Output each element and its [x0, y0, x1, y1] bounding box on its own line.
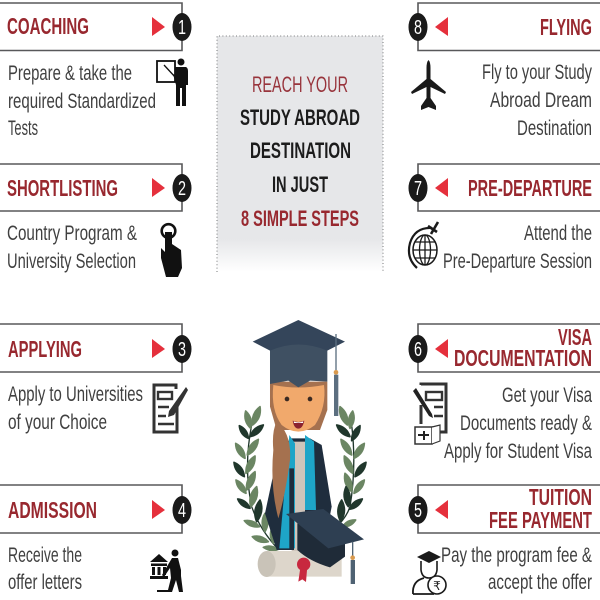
text: shortlisting description: University Selection — [7, 250, 136, 273]
title: coaching: COACHING — [7, 13, 89, 39]
heading: study abroad: STUDY ABROAD — [240, 105, 360, 130]
title: shortlisting: SHORTLISTING — [7, 175, 118, 201]
number badge 4: 4 — [178, 500, 186, 522]
icon: student with rupee coin — [413, 551, 446, 594]
heading: reach your: REACH YOUR — [252, 72, 348, 97]
panel: step 3 applying — [0, 324, 192, 434]
icon: visa documents — [413, 384, 446, 444]
text: admission description — [8, 544, 82, 594]
text: coaching description — [8, 62, 156, 140]
icon: globe and plane — [409, 222, 438, 268]
number badge 5 — [408, 496, 428, 524]
text: coaching description: Tests — [8, 117, 38, 140]
panel: step 8 flying — [408, 3, 600, 140]
text: shortlisting description: Country Program & — [7, 222, 137, 245]
laurel: left — [234, 407, 283, 551]
heading: 8 simple steps: 8 SIMPLE STEPS — [241, 206, 359, 231]
number badge 6: 6 — [414, 339, 422, 361]
number badge 7: 7 — [414, 178, 422, 200]
panel: step 4 admission — [0, 485, 192, 594]
number badge 2: 2 — [178, 178, 186, 200]
illustration: graduate with laurels — [234, 320, 366, 584]
text: visa description — [444, 384, 592, 463]
icon: pointing hand — [161, 224, 182, 277]
arrow — [152, 178, 165, 197]
title: tuition fee payment — [489, 484, 592, 533]
text: payment description — [441, 544, 592, 594]
panel: central headline — [217, 36, 383, 272]
text: applying description — [8, 383, 143, 434]
number badge 4 — [172, 496, 192, 524]
text: admission description: Receive the — [8, 544, 82, 567]
text: coaching description: required Standardized — [8, 90, 156, 113]
text: admission description: offer letters — [8, 571, 82, 594]
arrow — [152, 17, 165, 36]
panel: step 6 visa documentation — [408, 324, 600, 463]
number badge 8 — [408, 13, 428, 41]
icon: university and student — [150, 550, 183, 592]
text: coaching description: Prepare & take the — [8, 62, 132, 85]
number badge 7 — [408, 174, 428, 202]
text: pre-departure description — [443, 222, 592, 273]
title: visa documentation — [454, 324, 592, 371]
panel: step 1 coaching — [0, 3, 192, 140]
text: applying description: of your Choice — [8, 411, 107, 434]
arrow — [152, 500, 165, 519]
icon: student with rupee coin: ₹ — [433, 579, 441, 593]
text: applying description: Apply to Universities — [8, 383, 143, 406]
arrow — [435, 178, 448, 197]
icon: teacher at board — [157, 58, 188, 106]
graduation cap: worn — [253, 320, 345, 416]
number badge 3 — [172, 335, 192, 363]
panel: step 2 shortlisting — [0, 164, 192, 277]
heading: in just: IN JUST — [272, 172, 328, 197]
arrow — [435, 339, 448, 358]
heading: destination: DESTINATION — [250, 138, 351, 163]
title: admission: ADMISSION — [8, 497, 97, 523]
text: flying description — [482, 61, 592, 140]
number badge 1: 1 — [178, 17, 186, 39]
arrow — [435, 17, 448, 36]
icon: document and pencil — [154, 385, 188, 432]
number badge 8: 8 — [414, 17, 422, 39]
panel: step 5 tuition fee payment — [408, 484, 600, 594]
arrow — [435, 500, 448, 519]
title: applying: APPLYING — [8, 336, 82, 362]
number badge 2 — [172, 174, 192, 202]
number badge 5: 5 — [414, 500, 422, 522]
number badge 3: 3 — [178, 339, 186, 361]
text: shortlisting description — [7, 222, 137, 273]
number badge 1 — [172, 13, 192, 41]
figure: graduate — [265, 382, 332, 552]
diploma scroll — [258, 551, 342, 582]
graduation cap: on scroll — [286, 509, 364, 584]
number badge 6 — [408, 335, 428, 363]
panel: step 7 pre-departure — [408, 164, 600, 273]
laurel: right — [337, 407, 366, 527]
arrow — [152, 339, 165, 358]
icon: airplane — [411, 60, 446, 110]
